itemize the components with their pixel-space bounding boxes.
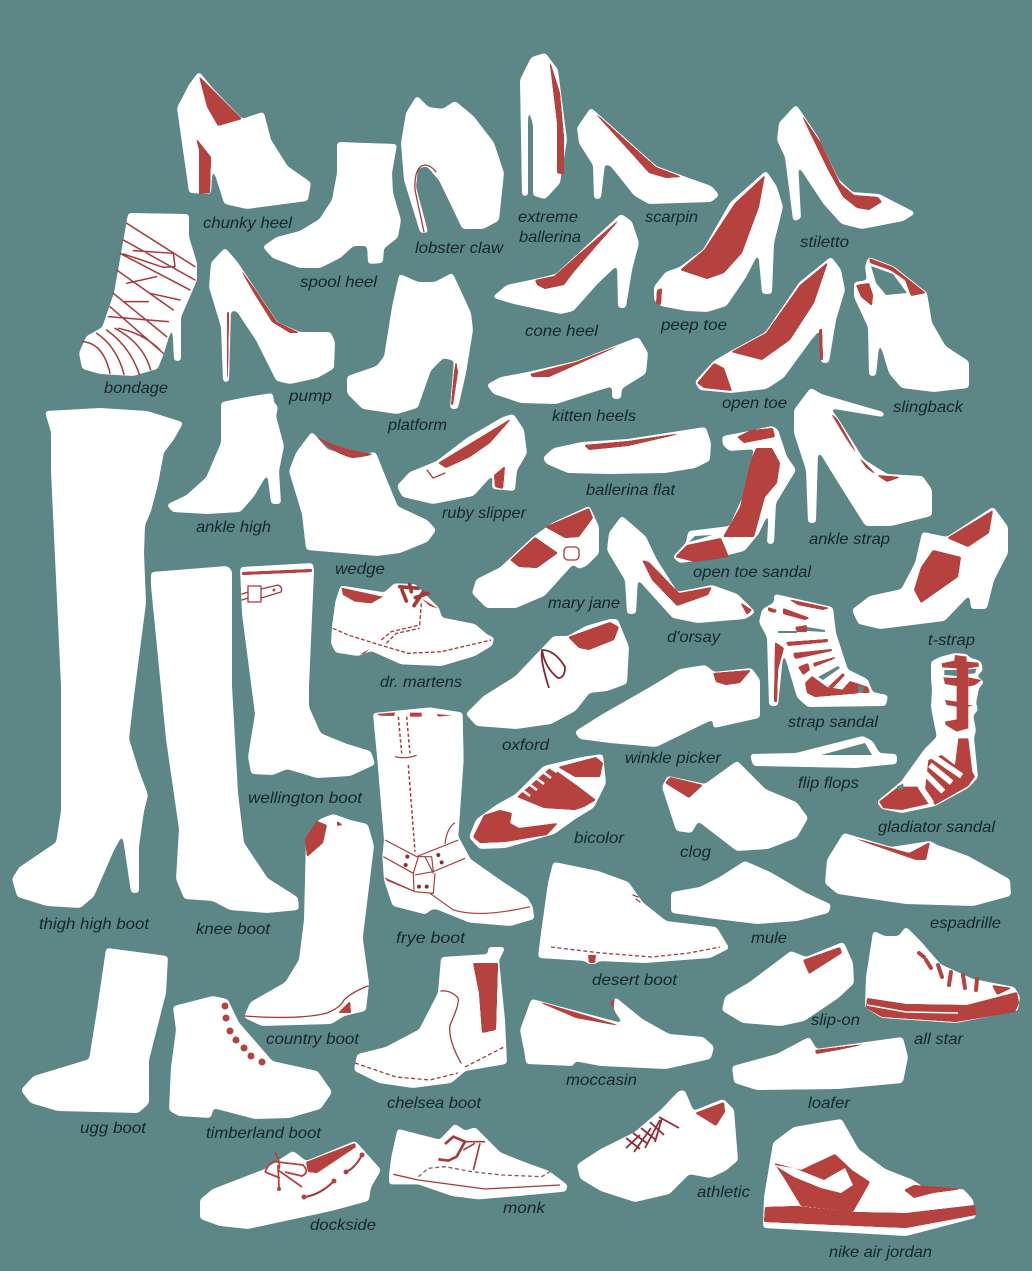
shoe: desert boot — [539, 863, 728, 989]
shoe: clog — [663, 762, 807, 861]
label: kitten heels: kitten heels — [552, 408, 636, 425]
shoe: chelsea boot — [355, 948, 506, 1112]
shoe: frye boot — [374, 708, 533, 947]
shoe: open toe sandal — [674, 427, 811, 581]
label: oxford: oxford — [502, 737, 550, 754]
shoe: dr. martens — [332, 584, 493, 691]
shoe: mule — [672, 862, 830, 947]
label: nike air jordan: nike air jordan — [829, 1244, 932, 1261]
label: all star: all star — [914, 1031, 964, 1048]
shoe: bondage — [80, 214, 196, 397]
shoe: spool heel — [264, 143, 400, 291]
label: spool heel: spool heel — [300, 274, 377, 291]
shoe: strap sandal — [760, 595, 887, 731]
label: bicolor: bicolor — [574, 830, 625, 847]
label: chunky heel: chunky heel — [203, 215, 292, 232]
shoe: ballerina flat — [544, 428, 710, 499]
label: stiletto: stiletto — [800, 234, 849, 251]
shoe: pump — [210, 249, 334, 405]
label: moccasin: moccasin — [566, 1072, 637, 1089]
label: espadrille: espadrille — [930, 915, 1001, 932]
label: gladiator sandal: gladiator sandal — [878, 819, 995, 836]
label: bondage: bondage — [104, 380, 168, 397]
label: country boot: country boot — [266, 1031, 360, 1048]
shoe: timberland boot — [170, 997, 331, 1142]
label: ugg boot: ugg boot — [80, 1120, 147, 1137]
label: slip-on: slip-on — [811, 1012, 860, 1029]
label: strap sandal: strap sandal — [788, 714, 878, 731]
label: clog: clog — [680, 844, 711, 861]
label: knee boot: knee boot — [196, 921, 271, 938]
shoe: peep toe — [655, 172, 782, 334]
label: ankle high: ankle high — [196, 519, 271, 536]
label: desert boot: desert boot — [592, 972, 678, 989]
shoe: t-strap — [853, 508, 1007, 649]
label: wellington boot: wellington boot — [248, 790, 363, 807]
shoe: winkle picker — [576, 666, 759, 767]
shoe: stiletto — [778, 106, 914, 251]
label: open toe: open toe — [722, 395, 787, 412]
shoe: dockside — [201, 1142, 380, 1234]
shoe: gladiator sandal — [878, 654, 995, 836]
shoe: wedge — [290, 433, 435, 578]
shoe: slip-on — [723, 943, 860, 1029]
shoe: wellington boot — [241, 564, 374, 807]
shoe: athletic — [578, 1091, 750, 1201]
label: cone heel: cone heel — [525, 323, 598, 340]
label: platform: platform — [387, 417, 447, 434]
shoe: country boot — [245, 815, 373, 1048]
shoe: oxford — [467, 620, 628, 754]
shoe: loafer — [733, 1038, 907, 1112]
label: slingback: slingback — [893, 399, 964, 416]
label: scarpin: scarpin — [645, 209, 698, 226]
shoe: ruby slipper — [398, 415, 527, 522]
label: monk: monk — [503, 1200, 546, 1217]
shoe: flip flops — [751, 737, 896, 792]
label: pump: pump — [288, 388, 332, 405]
shoe: scarpin — [578, 109, 718, 226]
shoe: ankle strap — [795, 389, 931, 548]
shoe: cone heel — [494, 215, 638, 340]
shoe: chunky heel — [178, 73, 310, 232]
shoe: ankle high — [168, 394, 283, 536]
shoe: extreme ballerina — [518, 54, 581, 246]
label: flip flops: flip flops — [798, 775, 859, 792]
label: d'orsay: d'orsay — [667, 629, 721, 646]
shoe: moccasin — [521, 998, 713, 1089]
shoe: extreme ballerina: ballerina — [519, 229, 581, 246]
label: extreme ballerina: extreme — [518, 209, 578, 226]
shoe: lobster claw — [402, 97, 504, 257]
label: winkle picker: winkle picker — [625, 750, 722, 767]
label: dockside: dockside — [310, 1217, 376, 1234]
label: dr. martens: dr. martens — [380, 674, 462, 691]
label: mary jane: mary jane — [548, 595, 620, 612]
shoe: ugg boot — [22, 949, 167, 1137]
shoe: d'orsay — [608, 517, 754, 646]
shoe: mary jane — [473, 507, 620, 612]
label: chelsea boot: chelsea boot — [387, 1095, 482, 1112]
shoe: nike air jordan — [764, 1120, 976, 1261]
label: lobster claw: lobster claw — [415, 240, 504, 257]
shoe: slingback — [855, 258, 968, 416]
label: open toe sandal: open toe sandal — [693, 564, 811, 581]
label: mule: mule — [751, 930, 787, 947]
label: loafer: loafer — [808, 1095, 851, 1112]
shoe: open toe — [696, 258, 844, 412]
label: thigh high boot: thigh high boot — [39, 916, 150, 933]
label: ruby slipper: ruby slipper — [442, 505, 527, 522]
label: timberland boot: timberland boot — [206, 1125, 322, 1142]
shoe: thigh high boot — [13, 409, 182, 933]
label: ballerina flat: ballerina flat — [586, 482, 676, 499]
shoe: monk — [390, 1125, 567, 1217]
label: athletic: athletic — [697, 1184, 750, 1201]
shoe: platform — [348, 274, 472, 434]
label: ankle strap: ankle strap — [809, 531, 890, 548]
label: frye boot: frye boot — [396, 930, 466, 947]
shoe: knee boot — [152, 567, 298, 938]
shoe: bicolor — [470, 755, 625, 848]
label: t-strap: t-strap — [928, 632, 975, 649]
shoe: kitten heels — [488, 338, 647, 425]
label: peep toe: peep toe — [660, 317, 727, 334]
label: wedge: wedge — [335, 561, 385, 578]
shoe: all star — [866, 928, 1019, 1048]
shoe: espadrille — [826, 834, 1010, 932]
